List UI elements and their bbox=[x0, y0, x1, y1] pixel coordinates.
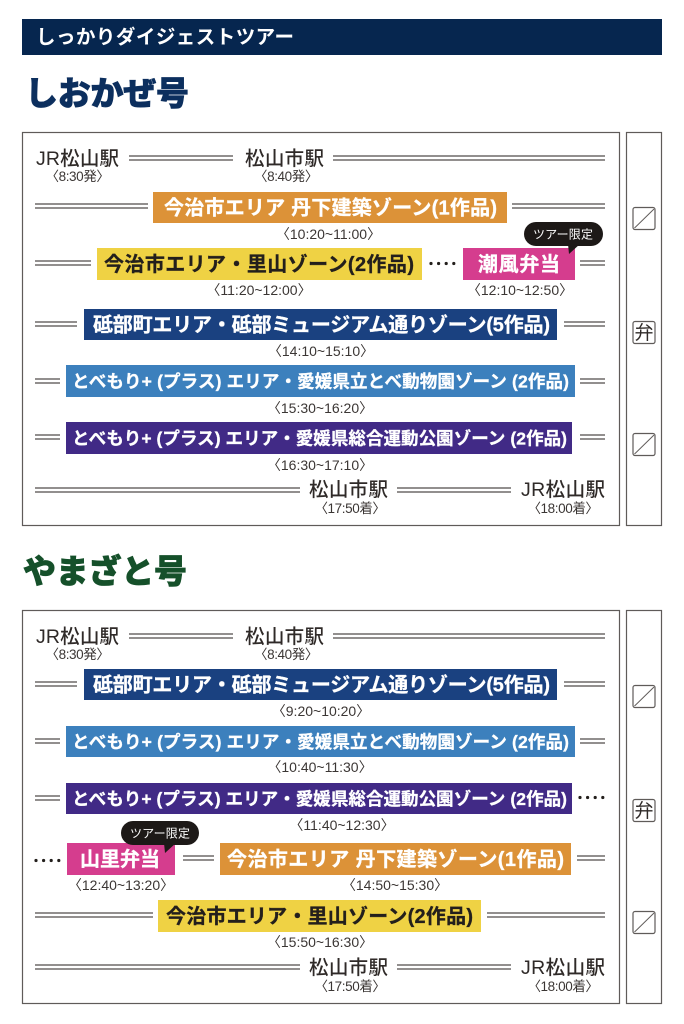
stop: 丹下建築ゾーン: 今治市エリア 丹下建築ゾーン(1作品) bbox=[227, 848, 564, 871]
row: arrival stations bbox=[35, 479, 605, 516]
row: departure stations: 松山市駅 bbox=[245, 148, 324, 170]
stop: 里山ゾーン: 今治市エリア・里山ゾーン(2作品) bbox=[104, 253, 414, 276]
row: arrival stations: 〈18:00着〉 bbox=[527, 500, 599, 516]
row: departure stations: 〈8:30発〉 bbox=[46, 169, 109, 184]
panel: やまざと号 meal column bbox=[626, 610, 662, 1004]
stop: 愛媛県立とべ動物園ゾーン: とべもり+ (プラス) エリア・愛媛県立とべ動物園ゾーン (2作品) bbox=[72, 372, 569, 392]
row: arrival stations: JR松山駅 bbox=[521, 479, 605, 501]
row: arrival stations: 〈17:50着〉 bbox=[314, 978, 386, 994]
stop: 砥部ミュージアム通りゾーン: 砥部町エリア・砥部ミュージアム通りゾーン(5作品) bbox=[93, 314, 550, 336]
stop: 愛媛県総合運動公園ゾーン: とべもり+ (プラス) エリア・愛媛県総合運動公園ゾーン (2作品) bbox=[72, 789, 567, 809]
stop: 丹下建築ゾーン: 〈14:50~15:30〉 bbox=[342, 877, 448, 893]
stop: 砥部ミュージアム通りゾーン: 〈14:10~15:10〉 bbox=[268, 343, 374, 359]
header banner: しっかりダイジェストツアー bbox=[36, 26, 294, 48]
stop: 愛媛県総合運動公園ゾーン: とべもり+ (プラス) エリア・愛媛県総合運動公園ゾーン (2作品) bbox=[72, 428, 567, 448]
row: arrival stations: 〈18:00着〉 bbox=[527, 978, 599, 994]
icon: bento: 弁 bbox=[634, 322, 654, 344]
row: departure stations: 〈8:30発〉 bbox=[46, 647, 109, 662]
stop: 丹下建築ゾーン bbox=[183, 843, 605, 893]
icon: no meal bbox=[633, 434, 655, 456]
row: departure stations: 松山市駅 bbox=[245, 626, 324, 648]
stop: 山里弁当: 〈12:40~13:20〉 bbox=[68, 877, 174, 893]
stop: 里山ゾーン: 今治市エリア・里山ゾーン(2作品) bbox=[166, 905, 473, 928]
stop: 愛媛県総合運動公園ゾーン bbox=[35, 783, 604, 833]
header banner bbox=[22, 19, 662, 55]
stop: 里山ゾーン bbox=[35, 900, 605, 950]
stop: 愛媛県立とべ動物園ゾーン: 〈10:40~11:30〉 bbox=[267, 759, 373, 775]
row: departure stations: JR松山駅 bbox=[36, 148, 119, 170]
row: departure stations: 〈8:40発〉 bbox=[254, 647, 318, 662]
stop: 砥部ミュージアム通りゾーン bbox=[35, 669, 605, 719]
stop: 山里弁当 bbox=[36, 821, 199, 893]
icon: bento: 弁 bbox=[634, 800, 654, 822]
stop: 潮風弁当: 潮風弁当 bbox=[478, 252, 560, 276]
stop: 丹下建築ゾーン: 今治市エリア 丹下建築ゾーン(1作品) bbox=[164, 196, 497, 220]
icon: no meal bbox=[633, 208, 655, 230]
row: departure stations bbox=[36, 626, 605, 662]
icon: no meal bbox=[633, 686, 655, 708]
stop: 愛媛県立とべ動物園ゾーン: とべもり+ (プラス) エリア・愛媛県立とべ動物園ゾーン (2作品) bbox=[72, 732, 569, 752]
callout: ツアー限定: ツアー限定 bbox=[533, 228, 593, 242]
row: departure stations: JR松山駅 bbox=[36, 626, 119, 648]
row: departure stations: 〈8:40発〉 bbox=[254, 169, 318, 184]
stop: 砥部ミュージアム通りゾーン: 〈9:20~10:20〉 bbox=[272, 703, 370, 719]
stop: 砥部ミュージアム通りゾーン: 砥部町エリア・砥部ミュージアム通りゾーン(5作品) bbox=[93, 674, 550, 696]
stop: 丹下建築ゾーン: 〈10:20~11:00〉 bbox=[276, 226, 381, 242]
stop: 里山ゾーン: 〈15:50~16:30〉 bbox=[267, 934, 373, 950]
heading: やまざと号: やまざと号 bbox=[23, 553, 187, 590]
stop: 愛媛県総合運動公園ゾーン: 〈16:30~17:10〉 bbox=[267, 457, 373, 473]
row: departure stations bbox=[36, 148, 605, 184]
callout: ツアー限定 bbox=[121, 821, 199, 853]
stop: 山里弁当: 山里弁当 bbox=[80, 847, 160, 871]
stop: 愛媛県立とべ動物園ゾーン bbox=[35, 726, 605, 775]
row: arrival stations: 〈17:50着〉 bbox=[314, 500, 386, 516]
row: arrival stations bbox=[35, 957, 605, 994]
row: arrival stations: 松山市駅 bbox=[309, 479, 388, 501]
callout: ツアー限定 bbox=[524, 222, 603, 254]
row: arrival stations: 松山市駅 bbox=[309, 957, 388, 979]
panel: しおかぜ号 meal column bbox=[626, 132, 662, 526]
stop: 愛媛県総合運動公園ゾーン bbox=[35, 422, 605, 473]
stop: 愛媛県立とべ動物園ゾーン bbox=[35, 365, 605, 416]
stop: 里山ゾーン: 〈11:20~12:00〉 bbox=[206, 282, 312, 298]
stop: 潮風弁当 bbox=[463, 222, 605, 298]
stop: 愛媛県立とべ動物園ゾーン: 〈15:30~16:20〉 bbox=[267, 400, 373, 416]
panel: やまざと号 route bbox=[22, 610, 620, 1004]
stop: 砥部ミュージアム通りゾーン bbox=[35, 309, 605, 359]
stop: 里山ゾーン bbox=[35, 248, 455, 298]
icon: no meal bbox=[633, 912, 655, 934]
stop: 潮風弁当: 〈12:10~12:50〉 bbox=[467, 282, 573, 298]
panel: しおかぜ号 route bbox=[22, 132, 620, 526]
row: arrival stations: JR松山駅 bbox=[521, 957, 605, 979]
stop: 丹下建築ゾーン bbox=[35, 192, 605, 242]
callout: ツアー限定: ツアー限定 bbox=[130, 826, 190, 840]
stop: 愛媛県総合運動公園ゾーン: 〈11:40~12:30〉 bbox=[289, 817, 395, 833]
heading: しおかぜ号: しおかぜ号 bbox=[25, 75, 189, 112]
